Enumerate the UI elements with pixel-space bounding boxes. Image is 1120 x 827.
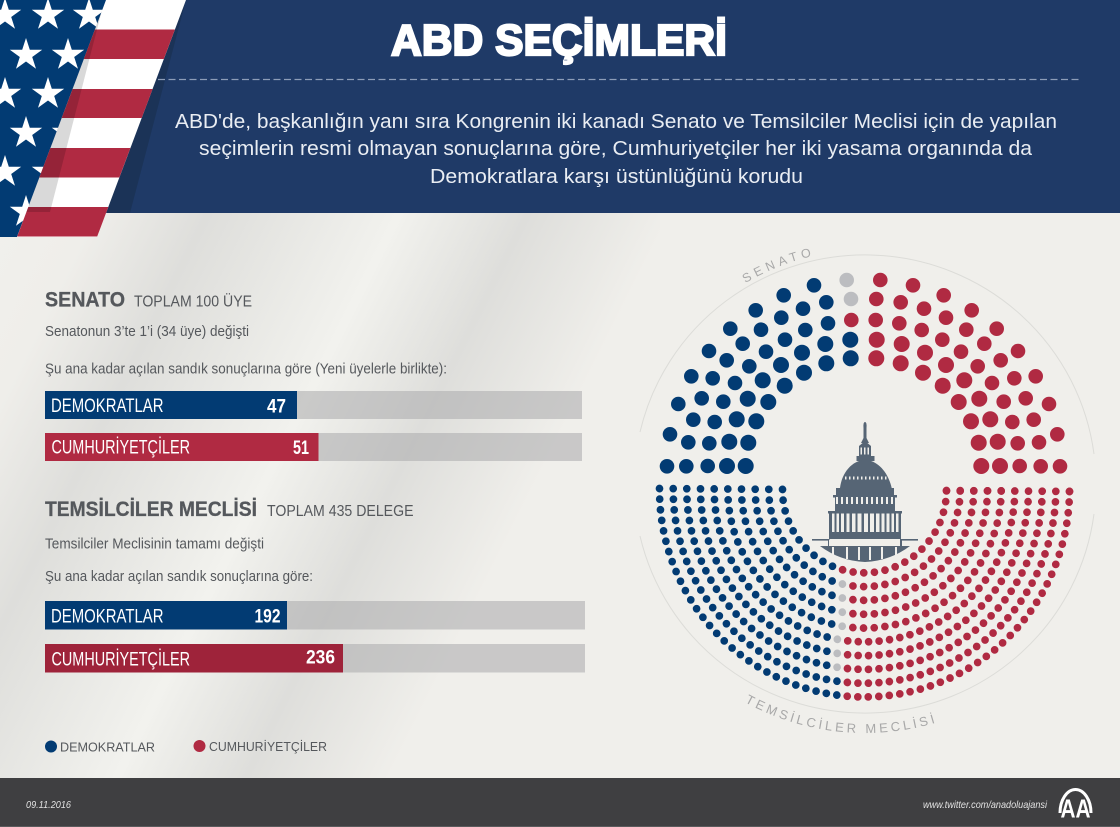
house bar: republicans: [45, 644, 585, 672]
senate bar: democrats: 47: [267, 396, 286, 418]
footer date: 09.11.2016: [26, 800, 71, 811]
panel: house results: [45, 498, 585, 672]
republican senate seats: [844, 273, 1067, 474]
undecided senate seats: [839, 273, 858, 306]
header band: [0, 0, 1120, 213]
intro text: ABD'de, başkanlığın yanı sıra Kongrenin iki kanadı Senato ve Temsilciler Meclisi için de yapılan: [175, 110, 1057, 133]
header divider: [158, 78, 1082, 80]
legend: [45, 739, 327, 754]
chart outline ring: [640, 255, 1094, 713]
house total: TOPLAM 435 DELEGE: [267, 503, 414, 520]
intro text: Demokratlara karşı üstünlüğünü korudu: [430, 165, 803, 188]
house subtitle: Şu ana kadar açılan sandık sonuçlarına göre:: [45, 569, 313, 585]
house bar: republicans: CUMHURİYETÇİLER: [52, 647, 190, 670]
house note: Temsilciler Meclisinin tamamı değişti: [45, 536, 264, 552]
chart: senate seats: [660, 273, 1067, 474]
intro text: seçimlerin resmi olmayan sonuçlarına göre, Cumhuriyetçiler her iki yasama organında da: [199, 137, 1033, 160]
democrat house seats: [656, 484, 841, 699]
senate total: TOPLAM 100 ÜYE: [134, 293, 252, 311]
senate note: Senatonun 3’te 1’i (34 üye) değişti: [45, 324, 249, 340]
ring label: house: TEMSİLCİLER MECLİSİ: [748, 694, 934, 734]
panel: senate results: [45, 289, 582, 461]
intro text: [175, 110, 1057, 188]
capitol window details: [829, 448, 900, 560]
icon: american flag ribbon: [0, 0, 186, 237]
heading: house: TEMSİLCİLER MECLİSİ: [45, 498, 257, 521]
footer bar: [0, 778, 1120, 827]
legend: DEMOKRATLAR: [60, 740, 155, 754]
title: ABD SEÇİMLERİ: [391, 16, 727, 65]
senate bar: democrats: [45, 391, 582, 419]
republican house seats: [838, 487, 1074, 701]
senate subtitle: Şu ana kadar açılan sandık sonuçlarına göre (Yeni üyelerle birlikte):: [45, 361, 447, 377]
heading: senate: SENATO: [45, 289, 125, 312]
house bar: democrats: 192: [254, 606, 281, 628]
legend: CUMHURİYETÇİLER: [209, 739, 327, 754]
footer source: www.twitter.com/anadoluajansi: [923, 799, 1048, 811]
chart: house seats: [658, 485, 1073, 698]
icon: AA logo: AA: [1060, 794, 1091, 824]
house bar: democrats: DEMOKRATLAR: [51, 605, 164, 627]
main background: [0, 213, 1120, 778]
senate bar: republicans: CUMHURİYETÇİLER: [52, 435, 190, 458]
ring label: senate: SENATO: [742, 248, 810, 282]
undecided house seats: [833, 580, 846, 672]
icon: capitol building: [812, 422, 918, 562]
house bar: democrats: [45, 601, 585, 630]
senate bar: democrats: DEMOKRATLAR: [51, 395, 164, 417]
senate bar: republicans: 51: [293, 437, 309, 459]
senate bar: republicans: [45, 433, 582, 461]
democrat senate seats: [660, 278, 859, 474]
republican end seats: [943, 487, 1073, 495]
house bar: republicans: 236: [306, 646, 335, 668]
